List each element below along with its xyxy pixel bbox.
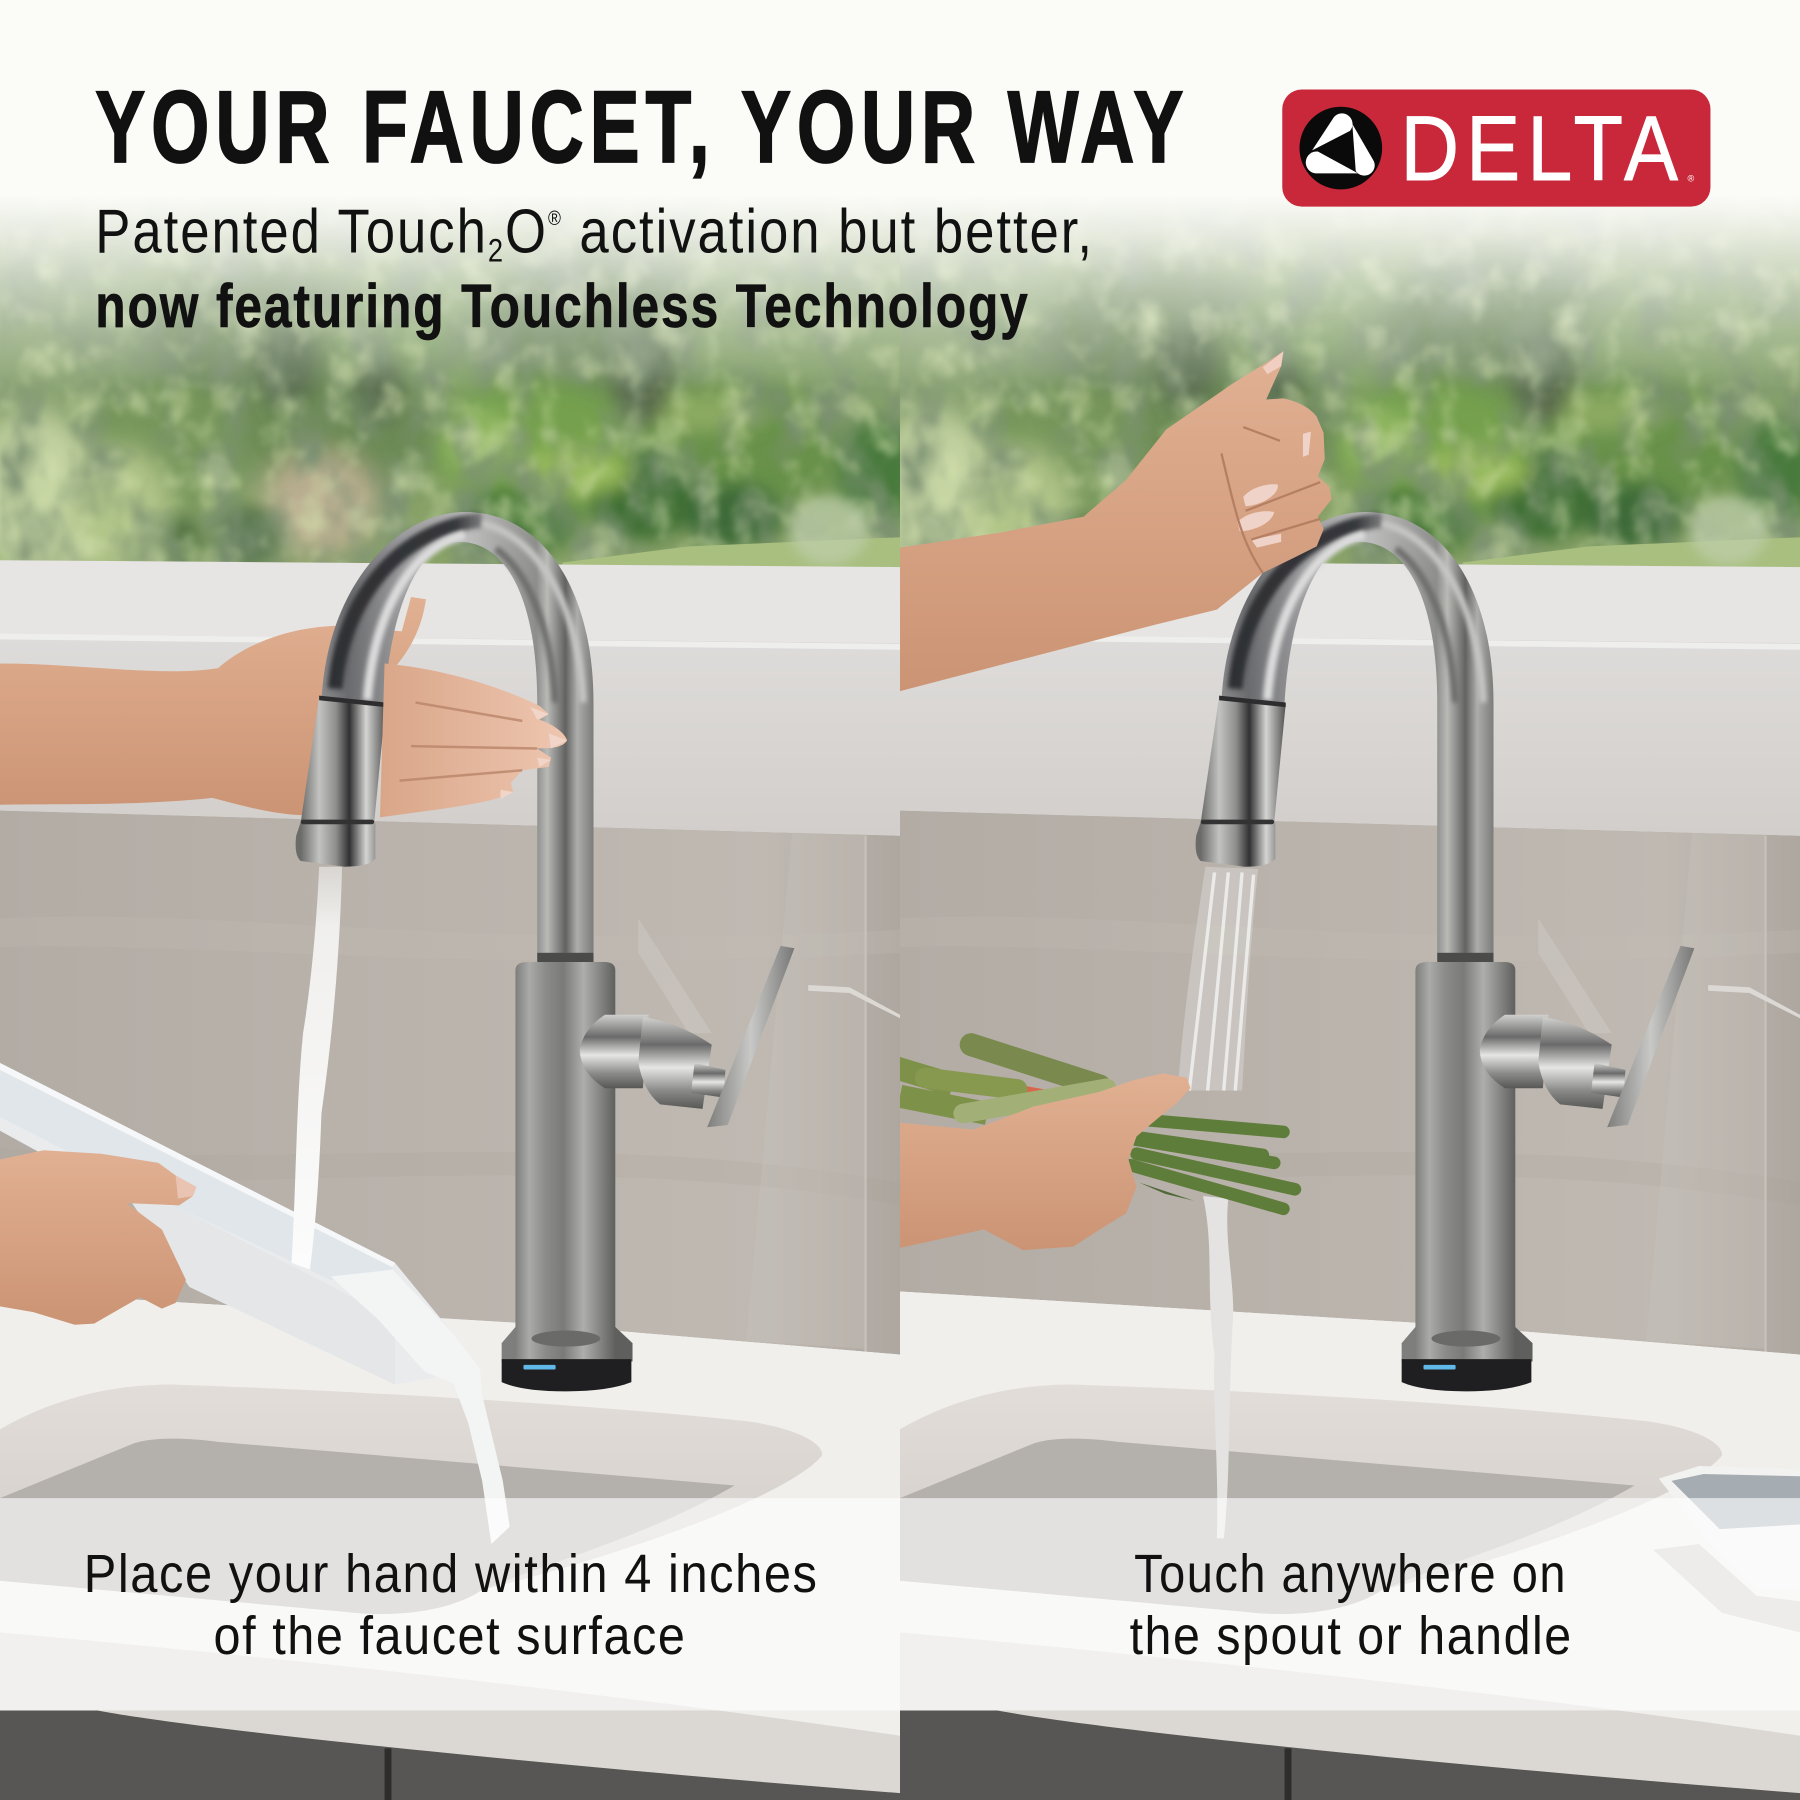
upper hand touching spout: [900, 351, 1332, 691]
asparagus bunch: [895, 1045, 1295, 1209]
caption: left: [84, 1544, 818, 1666]
subtitle line one: O: [505, 198, 548, 267]
caption band: right: [900, 1498, 1800, 1710]
caption: left: of the faucet surface: [214, 1606, 686, 1666]
water pouring off tray: [331, 1270, 510, 1544]
registered mark: ®: [1688, 173, 1695, 183]
dish on counter: [1653, 1466, 1800, 1632]
title: YOUR FAUCET, YOUR WAY: [95, 70, 1189, 184]
logo: Delta: [1282, 90, 1710, 207]
subtitle line two: now featuring Touchless Technology: [95, 272, 1030, 340]
caption: right: the spout or handle: [1130, 1606, 1573, 1666]
panel: left scene: [0, 207, 900, 1800]
icon: Delta emblem: [1299, 107, 1382, 189]
faucet: left: [296, 512, 794, 1391]
fingers in front of spout: [380, 664, 567, 817]
logo wordmark: DELTA: [1401, 98, 1685, 200]
subtitle line one: Patented Touch: [95, 198, 557, 267]
water spray: right: [1178, 867, 1258, 1538]
subtitle line one: activation but better,: [563, 198, 1094, 267]
hand holding asparagus: [900, 1073, 1190, 1250]
caption: right: Touch anywhere on: [1134, 1544, 1567, 1604]
caption: right: [1130, 1544, 1573, 1666]
faucet: right: [1196, 512, 1694, 1391]
subtitle line one: 2: [488, 233, 505, 269]
water stream: left: [292, 867, 342, 1270]
lower hand holding tray: [0, 1150, 196, 1325]
left hand behind spout: [0, 597, 426, 817]
caption: left: Place your hand within 4 inches: [84, 1544, 818, 1604]
subtitle line one: ®: [548, 207, 563, 230]
caption band: left: [0, 1498, 900, 1710]
panel: right scene: [900, 207, 1800, 1800]
tray with water: [0, 1063, 480, 1384]
